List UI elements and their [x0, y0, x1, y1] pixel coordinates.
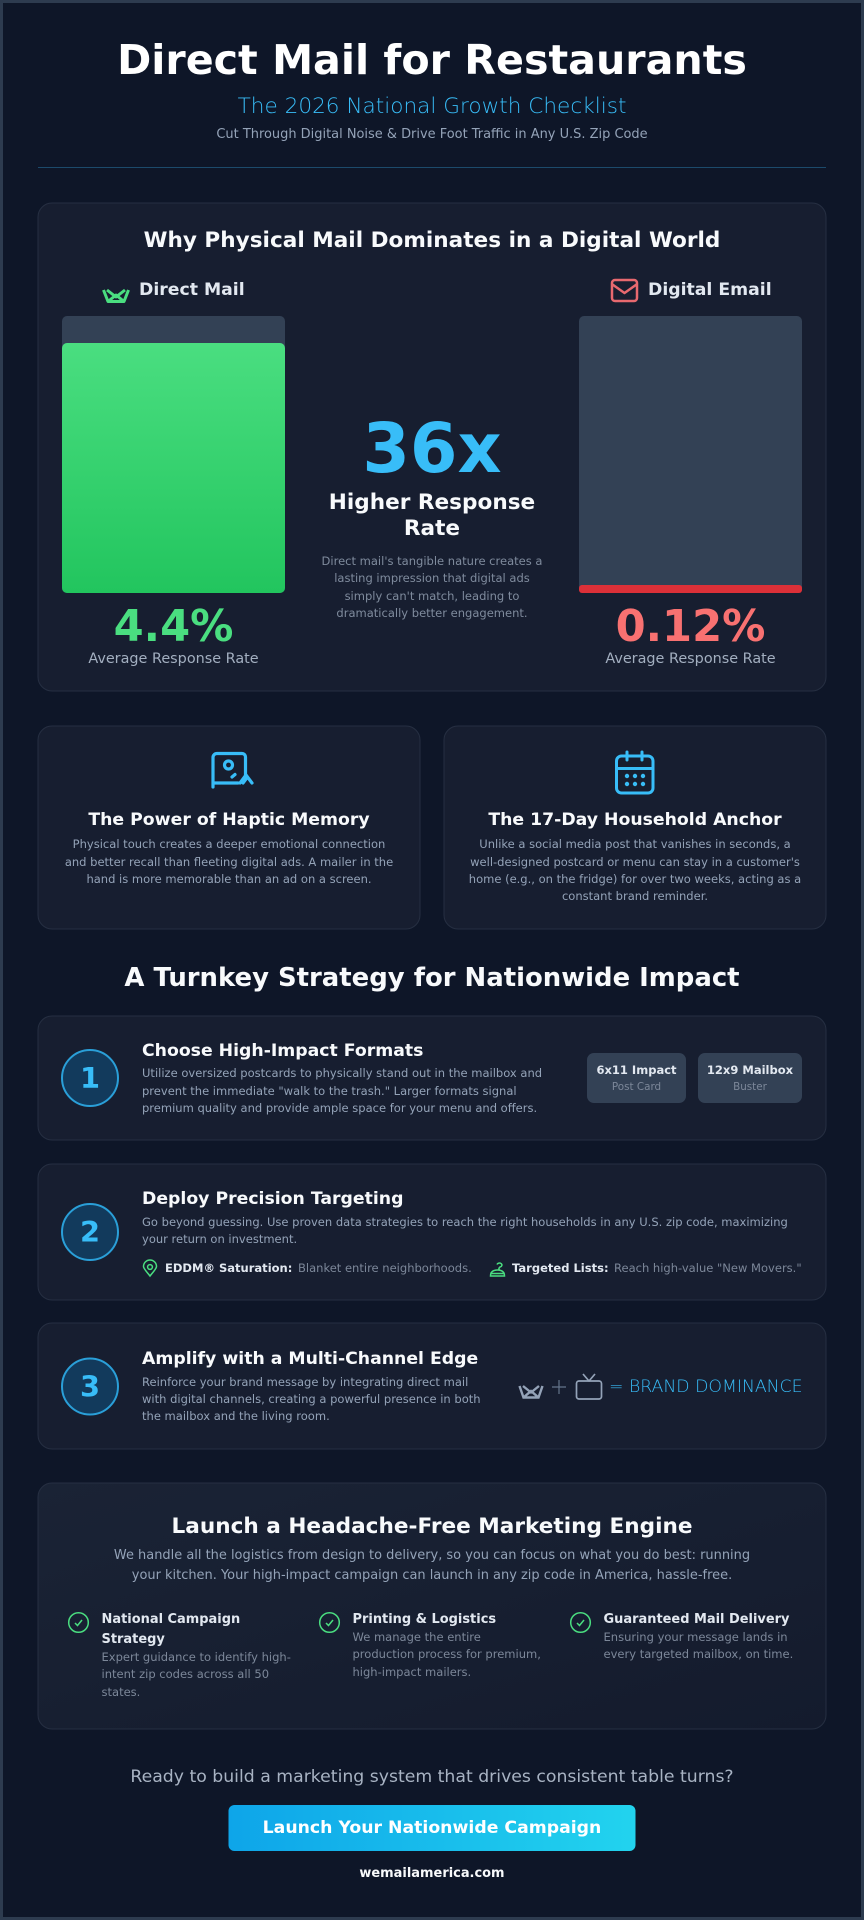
feature title: Guaranteed Mail Delivery — [604, 1612, 790, 1627]
card background — [444, 726, 826, 929]
format badge 12x9: 12x9 Mailbox — [707, 1063, 794, 1077]
equation result: = BRAND DOMINANCE — [609, 1377, 803, 1397]
feature: printing and logistics — [320, 1612, 541, 1679]
feature title: National Campaign — [102, 1612, 240, 1627]
panel intro: your kitchen. Your high-impact campaign can launch in any zip code in America, hassle-free. — [132, 1568, 732, 1583]
format badge 12x9: Buster — [733, 1081, 768, 1093]
value 0.12%: 0.12% — [616, 602, 765, 652]
panel: why physical mail dominates — [38, 203, 826, 691]
icon: television — [576, 1374, 602, 1399]
step number badge: 1 — [80, 1061, 100, 1095]
panel: haptic memory — [38, 726, 420, 929]
step text: with digital channels, creating a powerful presence in both — [142, 1392, 481, 1406]
stat label: Higher Response — [329, 490, 535, 515]
feature text: states. — [102, 1685, 140, 1699]
stat label line two: Rate — [404, 516, 460, 541]
step text: prevent the immediate "walk to the trash." Larger formats signal — [142, 1084, 517, 1098]
digital email label: Digital Email — [648, 280, 772, 300]
title: Direct Mail for Restaurants — [117, 36, 747, 84]
icon: targeted person — [490, 1263, 504, 1276]
plus sign — [552, 1380, 566, 1394]
card text — [65, 837, 393, 886]
format badge 6x11: Post Card — [612, 1081, 661, 1093]
bar fill 4.4% — [62, 343, 285, 593]
direct mail label: Direct Mail — [139, 280, 245, 300]
card text — [469, 837, 801, 903]
panel: step 2 — [38, 1164, 826, 1300]
stat description: Direct mail's tangible nature creates a — [322, 554, 542, 568]
panel: step 1 — [38, 1016, 826, 1140]
feature text: high-impact mailers. — [352, 1665, 471, 1679]
call to action — [130, 1767, 734, 1881]
step title: Deploy Precision Targeting — [142, 1189, 403, 1209]
card text: constant brand reminder. — [562, 889, 708, 903]
tagline: Cut Through Digital Noise & Drive Foot Traffic in Any U.S. Zip Code — [216, 127, 648, 142]
panel: step 3 — [38, 1323, 826, 1449]
step background — [38, 1323, 826, 1449]
step text — [142, 1375, 481, 1423]
step text: the mailbox and the living room. — [142, 1409, 330, 1423]
card heading: The 17-Day Household Anchor — [488, 810, 782, 830]
digital email column — [579, 280, 802, 667]
stat description — [322, 554, 542, 620]
step text: premium quality and provide ample space for your menu and offers. — [142, 1101, 537, 1115]
feature text: We manage the entire — [352, 1630, 481, 1644]
feature text: production process for premium, — [352, 1647, 541, 1661]
icon: check — [571, 1613, 590, 1632]
panel background — [38, 1483, 826, 1729]
icon: envelope — [612, 280, 637, 301]
bar fill 0.12% — [579, 585, 802, 593]
center stat — [322, 410, 542, 620]
card text: hand is more memorable than an ad on a screen. — [86, 872, 372, 886]
caption: Average Response Rate — [88, 651, 259, 667]
bar track — [579, 316, 802, 593]
targeted lists: Reach high-value "New Movers." — [614, 1261, 802, 1275]
website: wemailamerica.com — [359, 1866, 505, 1881]
feature text: Expert guidance to identify high- — [102, 1650, 291, 1664]
cta button — [228, 1805, 636, 1851]
feature text — [352, 1630, 541, 1679]
value 4.4%: 4.4% — [114, 602, 233, 652]
step number badge: 2 — [80, 1215, 100, 1249]
step background — [38, 1164, 826, 1300]
icon: check — [320, 1613, 339, 1632]
feature text: every targeted mailbox, on time. — [604, 1647, 793, 1661]
targeted lists: Targeted Lists: — [512, 1261, 609, 1275]
stat 36x: 36x — [362, 410, 502, 489]
step text — [142, 1066, 542, 1115]
step number badge: 3 — [80, 1370, 100, 1404]
icon: check — [69, 1613, 88, 1632]
step title: Amplify with a Multi-Channel Edge — [142, 1349, 478, 1369]
stat description: simply can't match, leading to — [345, 589, 519, 603]
feature text: intent zip codes across all 50 — [102, 1667, 269, 1681]
icon: direct mail — [104, 290, 128, 302]
card text: well-designed postcard or menu can stay in a customer's — [470, 855, 800, 869]
step background — [38, 1016, 826, 1140]
EDDM saturation: EDDM® Saturation: — [165, 1261, 292, 1275]
step text: your return on investment. — [142, 1232, 297, 1246]
panel intro: We handle all the logistics from design to delivery, so you can focus on what you do best: running — [114, 1548, 750, 1563]
card heading: The Power of Haptic Memory — [88, 810, 370, 830]
panel background — [38, 203, 826, 691]
EDDM saturation — [165, 1261, 472, 1275]
feature: guaranteed delivery — [571, 1612, 793, 1661]
panel intro — [114, 1548, 750, 1583]
card background — [38, 726, 420, 929]
icon: calendar — [616, 752, 653, 793]
feature text — [604, 1630, 793, 1661]
format badge 12x9 — [698, 1053, 802, 1103]
card text: Unlike a social media post that vanishes in seconds, a — [479, 837, 791, 851]
icon: mail small — [520, 1386, 542, 1398]
step number badge — [62, 1358, 118, 1414]
targeted lists — [512, 1261, 802, 1275]
cta button: Launch Your Nationwide Campaign — [263, 1818, 601, 1838]
stat description: lasting impression that digital ads — [334, 571, 530, 585]
step number badge — [62, 1204, 118, 1260]
card text: Physical touch creates a deeper emotional connection — [73, 837, 385, 851]
feature text — [102, 1650, 291, 1699]
header — [38, 36, 826, 168]
step text: Utilize oversized postcards to physically stand out in the mailbox and — [142, 1066, 542, 1080]
cta question: Ready to build a marketing system that drives consistent table turns? — [130, 1767, 734, 1787]
caption: Average Response Rate — [605, 651, 776, 667]
subtitle: The 2026 National Growth Checklist — [238, 94, 626, 119]
step text: Reinforce your brand message by integrating direct mail — [142, 1375, 468, 1389]
format badge 6x11: 6x11 Impact — [596, 1063, 677, 1077]
section heading: A Turnkey Strategy for Nationwide Impact — [124, 963, 740, 993]
panel: headache-free engine — [38, 1483, 826, 1729]
step text — [142, 1215, 788, 1246]
step number badge — [62, 1050, 118, 1106]
EDDM saturation: Blanket entire neighborhoods. — [298, 1261, 472, 1275]
icon: haptic mailer — [213, 754, 252, 787]
header divider — [38, 167, 826, 168]
step text: Go beyond guessing. Use proven data strategies to reach the right households in any U.S. zip code, maximizing — [142, 1215, 788, 1229]
panel heading: Launch a Headache-Free Marketing Engine — [172, 1514, 692, 1539]
feature title line two: Strategy — [102, 1632, 165, 1647]
feature: national campaign strategy — [69, 1612, 291, 1699]
panel: household anchor — [444, 726, 826, 929]
card text: and better recall than fleeting digital ads. A mailer in the — [65, 855, 393, 869]
stat description: dramatically better engagement. — [336, 606, 528, 620]
step title: Choose High-Impact Formats — [142, 1041, 423, 1061]
icon: location pin — [144, 1260, 156, 1276]
format badge 6x11 — [587, 1053, 686, 1103]
card text: home (e.g., on the fridge) for over two weeks, acting as a — [469, 872, 801, 886]
panel heading: Why Physical Mail Dominates in a Digital World — [144, 228, 720, 253]
bar track — [62, 316, 285, 593]
feature text: Ensuring your message lands in — [604, 1630, 788, 1644]
feature title: Printing & Logistics — [352, 1612, 496, 1627]
direct mail column — [62, 280, 285, 667]
